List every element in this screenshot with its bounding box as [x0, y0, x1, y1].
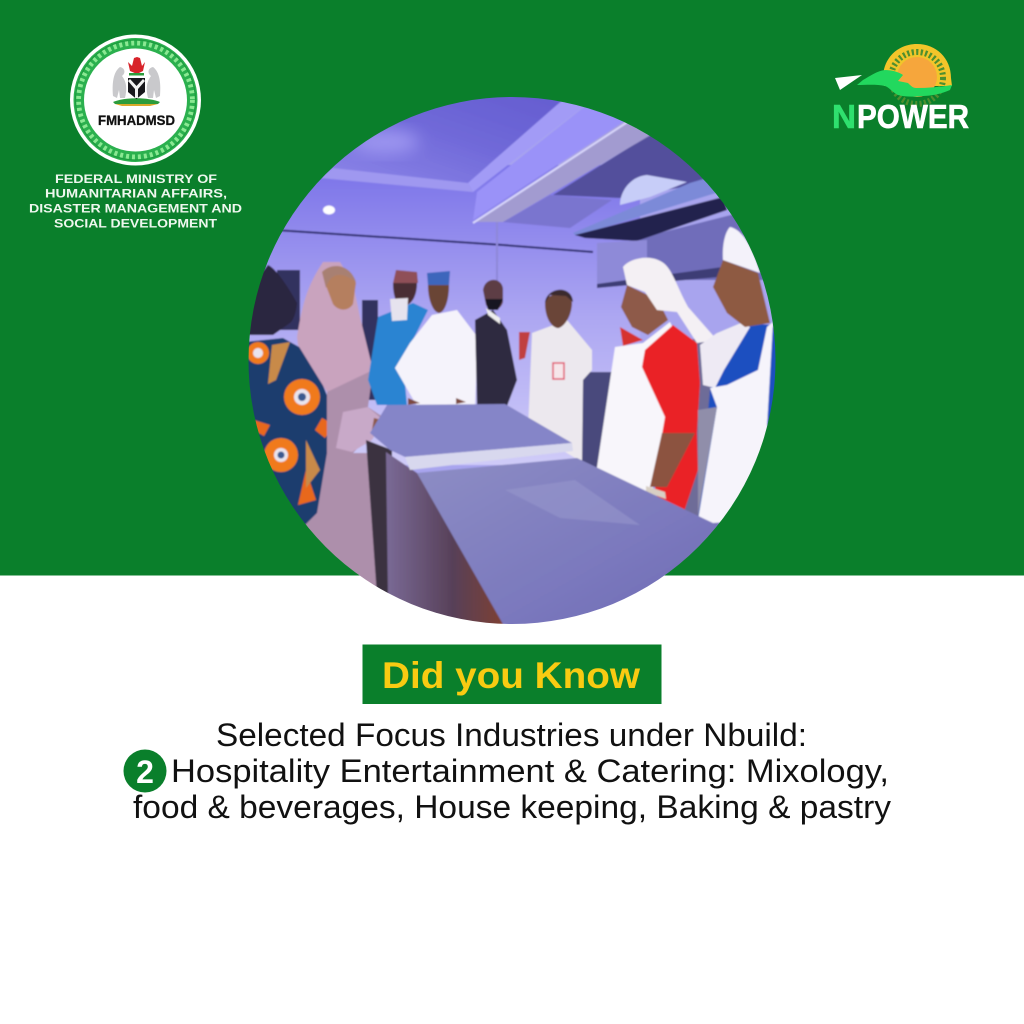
number badge — [124, 750, 166, 792]
lower ceiling — [503, 195, 612, 228]
person: man in dark suit — [475, 280, 517, 406]
hood underside — [575, 197, 727, 241]
back equipment — [277, 270, 378, 400]
Did you Know banner — [362, 644, 662, 704]
ceiling — [332, 97, 562, 182]
ceiling cornice — [468, 102, 582, 192]
green hand — [857, 70, 952, 97]
kitchen wall — [230, 165, 640, 465]
Did you Know banner: Did you Know — [382, 655, 640, 696]
ministry name — [29, 172, 242, 230]
dark ceiling recess — [553, 136, 704, 199]
wall cornice — [320, 168, 473, 192]
ministry name: HUMANITARIAN AFFAIRS, — [45, 186, 227, 200]
person: man in white kaftan with ID badge — [519, 290, 592, 462]
back equipment right — [581, 371, 612, 468]
stainless steel prep table — [365, 402, 720, 624]
person behind cooks — [684, 338, 711, 516]
ceiling beam — [474, 108, 624, 218]
green header band — [0, 0, 1024, 576]
coat of arms — [113, 57, 160, 106]
person: man cook in blue with white apron and toque — [696, 226, 776, 524]
person: man in blue — [368, 270, 428, 405]
hood back box — [597, 240, 647, 285]
hood back panel — [640, 214, 763, 280]
NPower logo — [832, 44, 969, 135]
wordmark: POWER — [857, 98, 969, 135]
seal patterned green ring — [74, 38, 198, 162]
hood dome — [620, 175, 687, 205]
seal outer white ring — [70, 34, 201, 166]
ministry name: DISASTER MANAGEMENT AND — [29, 202, 242, 216]
beam underside — [478, 122, 650, 222]
wall trim line — [275, 230, 593, 252]
beam edge — [472, 122, 628, 224]
wall column — [496, 222, 498, 310]
person: woman in orange print — [248, 264, 328, 525]
ministry name: FEDERAL MINISTRY OF — [55, 172, 217, 186]
rising sun — [883, 44, 952, 104]
body text: Selected Focus Industries under Nbuild: — [216, 717, 807, 753]
circular photo: kitchen visit — [248, 97, 776, 624]
body text: food & beverages, House keeping, Baking & pastry — [133, 789, 891, 825]
ceiling highlight — [351, 130, 419, 154]
wordmark: N — [832, 98, 856, 135]
seal abbreviation: FMHADMSD — [98, 112, 175, 128]
hood bracket — [597, 266, 730, 288]
ministry name: SOCIAL DEVELOPMENT — [54, 216, 218, 230]
number badge: 2 — [136, 754, 154, 790]
photo backing — [405, 106, 774, 496]
ministry logo: FMHADMSD seal — [70, 34, 201, 166]
hood side — [573, 178, 716, 236]
person: man in white agbada — [395, 271, 482, 406]
body text: Hospitality Entertainment & Catering: Mixology, — [171, 753, 889, 789]
person: woman cook in red with white apron — [590, 258, 717, 515]
body text — [133, 717, 891, 825]
ceiling light — [323, 206, 335, 214]
seal inner white disc — [84, 48, 187, 152]
person: woman in lilac hijab — [296, 262, 381, 587]
white paper wedge — [835, 75, 862, 90]
